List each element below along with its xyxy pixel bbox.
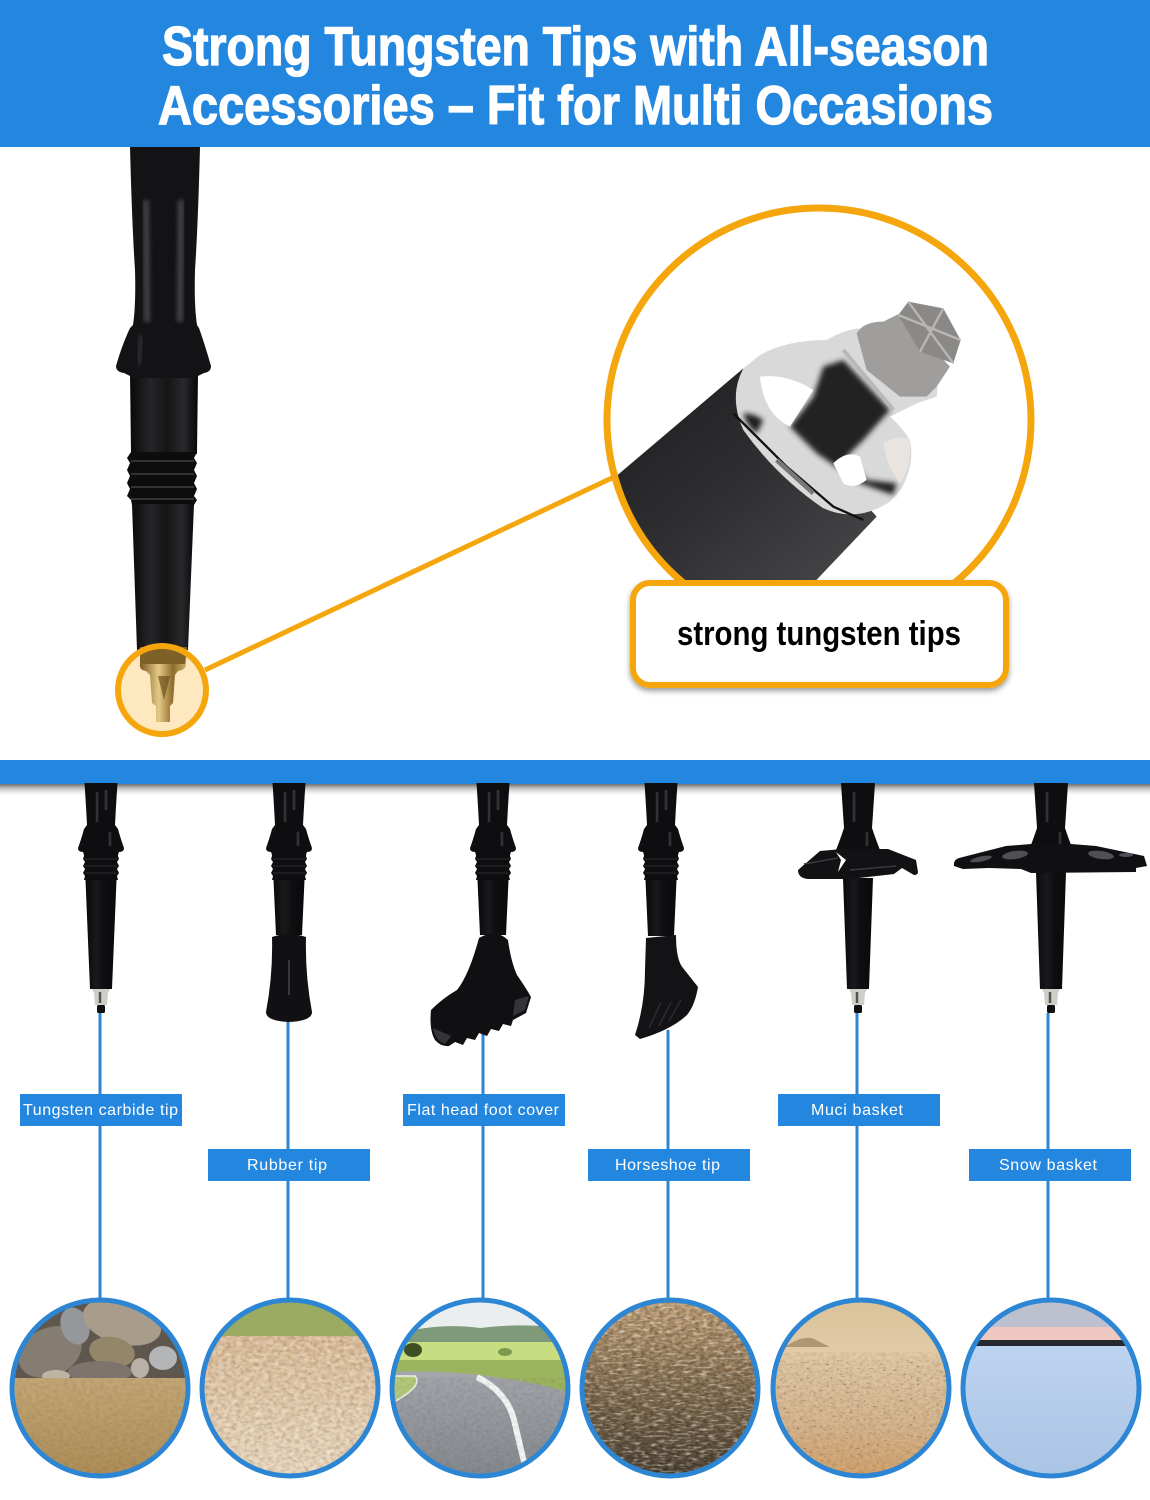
zoomed tungsten tip circle	[604, 204, 1034, 580]
icon: brass tip	[140, 647, 187, 722]
dark reflection	[790, 360, 897, 495]
pole: tungsten carbide tip	[78, 783, 124, 1013]
label: Flat head foot cover	[403, 1094, 565, 1126]
terrain circle: coarse ground	[580, 1298, 760, 1478]
connector lines	[100, 1013, 1048, 1298]
icon: snow basket	[954, 844, 1147, 873]
label: Tungsten carbide tip: Tungsten carbide tip	[23, 1102, 178, 1119]
terrain circle: gravel	[200, 1298, 380, 1478]
title text line 1: Strong Tungsten Tips with All-season	[162, 15, 989, 77]
label: Snow basket	[969, 1149, 1131, 1181]
pole: snow basket	[954, 783, 1147, 1013]
terrain circle: paved road	[390, 1298, 570, 1478]
label: Rubber tip	[208, 1149, 370, 1181]
orange connector line	[205, 477, 614, 670]
label: Muci basket: Muci basket	[811, 1102, 904, 1119]
pole: muci basket	[798, 783, 918, 1013]
pole: flat head foot cover	[430, 783, 531, 1046]
label: Horseshoe tip	[588, 1149, 750, 1181]
terrain circle: sandy beach	[771, 1298, 951, 1478]
metal flange	[736, 328, 938, 514]
title text line 2: Accessories – Fit for Multi Occasions	[158, 74, 993, 136]
zoomed tool body	[600, 368, 877, 583]
callout: strong tungsten tips	[633, 583, 1006, 685]
carbide point	[857, 313, 950, 397]
label: Snow basket: Snow basket	[999, 1157, 1098, 1174]
terrain circle: water	[961, 1298, 1141, 1478]
white reflections	[760, 376, 813, 427]
terrain circle: rocks and dirt	[10, 1290, 190, 1478]
label: Tungsten carbide tip	[20, 1094, 182, 1126]
main trekking pole	[116, 147, 211, 650]
blue divider bar	[0, 760, 1150, 797]
label: Flat head foot cover: Flat head foot cover	[407, 1102, 560, 1119]
tip highlight circle	[118, 646, 206, 734]
callout text: strong tungsten tips	[677, 615, 961, 653]
label: Muci basket	[778, 1094, 940, 1126]
pole: rubber tip	[266, 783, 312, 1022]
label: Rubber tip: Rubber tip	[247, 1157, 327, 1174]
icon: small basket	[798, 849, 918, 879]
title banner	[0, 0, 1150, 147]
pole: horseshoe tip	[635, 783, 698, 1039]
label: Horseshoe tip: Horseshoe tip	[615, 1157, 720, 1174]
